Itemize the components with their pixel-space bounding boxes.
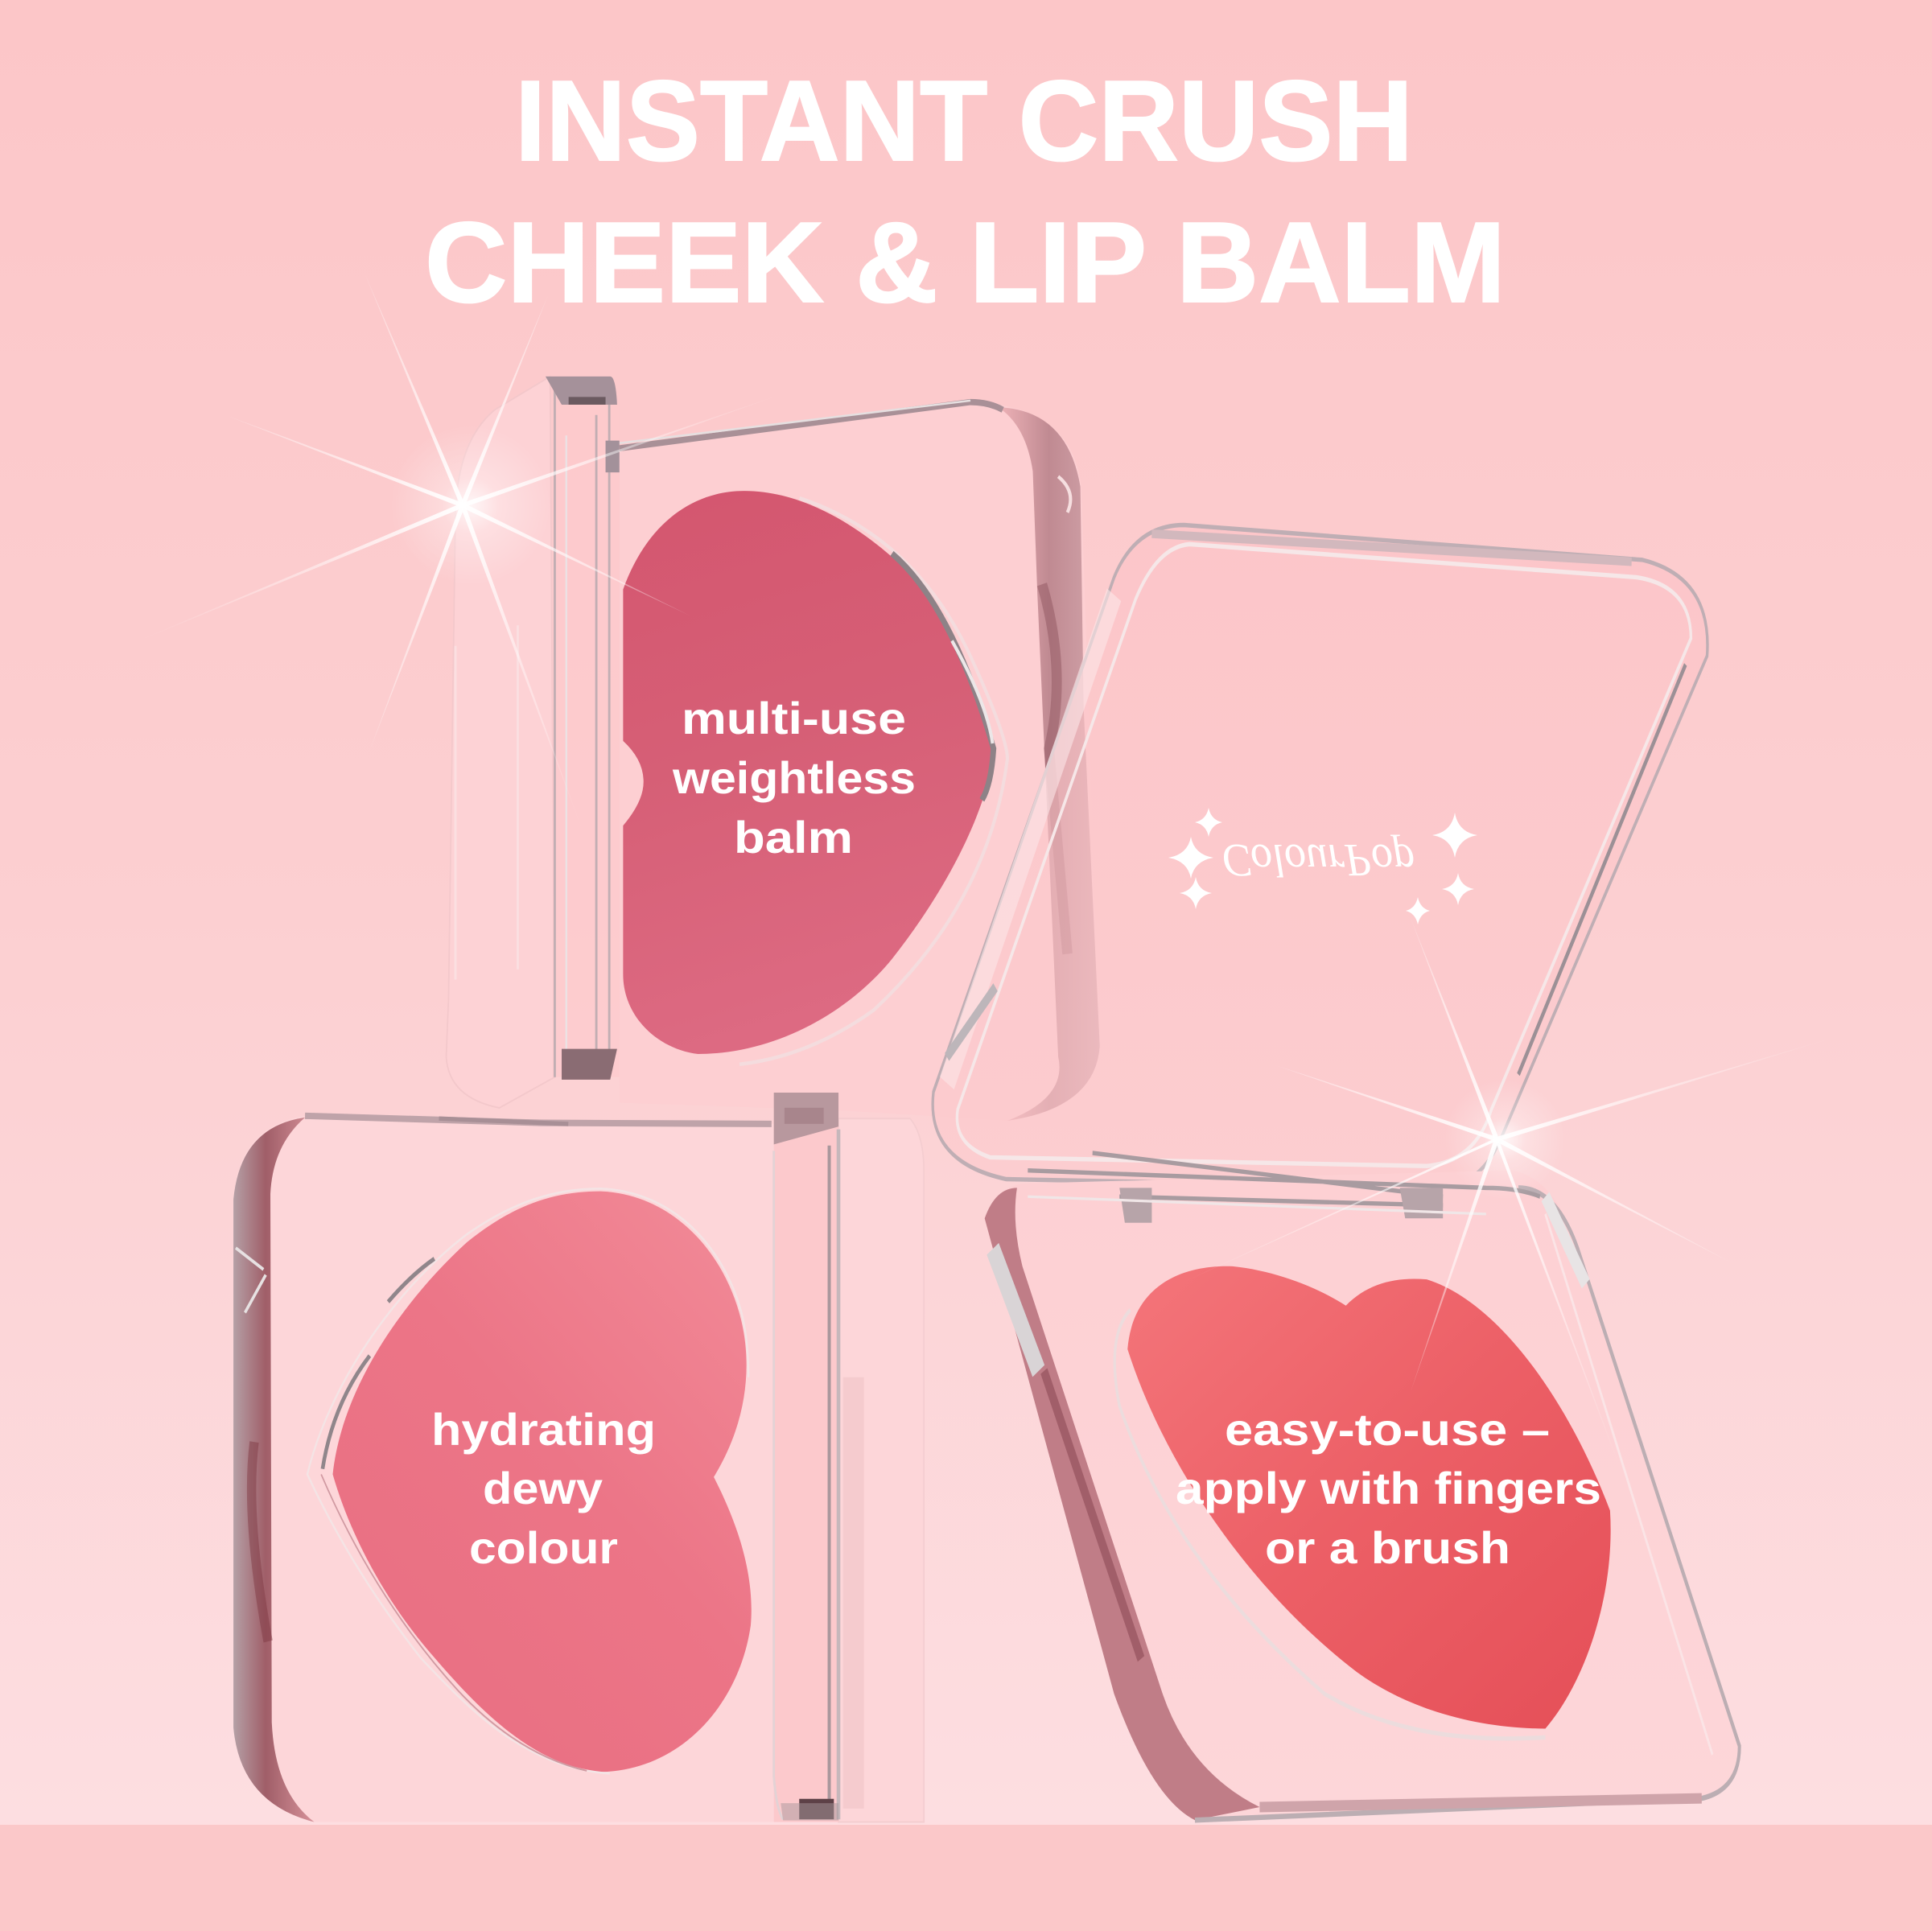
title [425,57,1506,327]
label: hydrating dewy colour: colour [469,1522,618,1573]
label: multi-use weightless balm: balm [734,812,853,863]
floor band [0,1825,1932,1931]
label: easy-to-use [1176,1404,1601,1573]
label: multi-use weightless balm: weightless [672,752,916,803]
base [985,1171,1740,1820]
label: hydrating dewy colour: dewy [483,1463,603,1513]
logo: mirrored brand [1168,808,1477,924]
label: hydrating dewy colour [431,1404,656,1573]
label: hydrating dewy colour: hydrating [431,1404,656,1455]
compact: top, multi-use balm [447,377,1100,1121]
label: easy-to-use: easy-to-use – [1225,1404,1550,1455]
label: easy-to-use: or a brush [1265,1522,1510,1573]
sparkle: lower right [1179,918,1830,1484]
label: easy-to-use: apply with fingers [1176,1463,1601,1513]
sparkle: upper left [130,271,789,838]
base left rim [985,1188,1259,1820]
lid side strip [546,377,620,1080]
heart: deep rose [623,491,995,1054]
label: multi-use weightless balm [672,693,916,863]
lid side strip [774,1093,838,1822]
title: INSTANT CRUSH [515,57,1413,185]
compact: bottom left, hydrating dewy colour [233,1093,924,1822]
compact: right, open with heart and mirror lid [933,525,1740,1820]
mirror lid [933,525,1707,1188]
logo: mirrored brand: ColourPop [1221,834,1415,887]
heart: mid pink [333,1192,752,1772]
label: multi-use weightless balm: multi-use [682,693,906,743]
title: CHEEK & LIP BALM [425,199,1506,327]
heart: coral [1127,1266,1611,1728]
hinge [1028,1153,1540,1223]
